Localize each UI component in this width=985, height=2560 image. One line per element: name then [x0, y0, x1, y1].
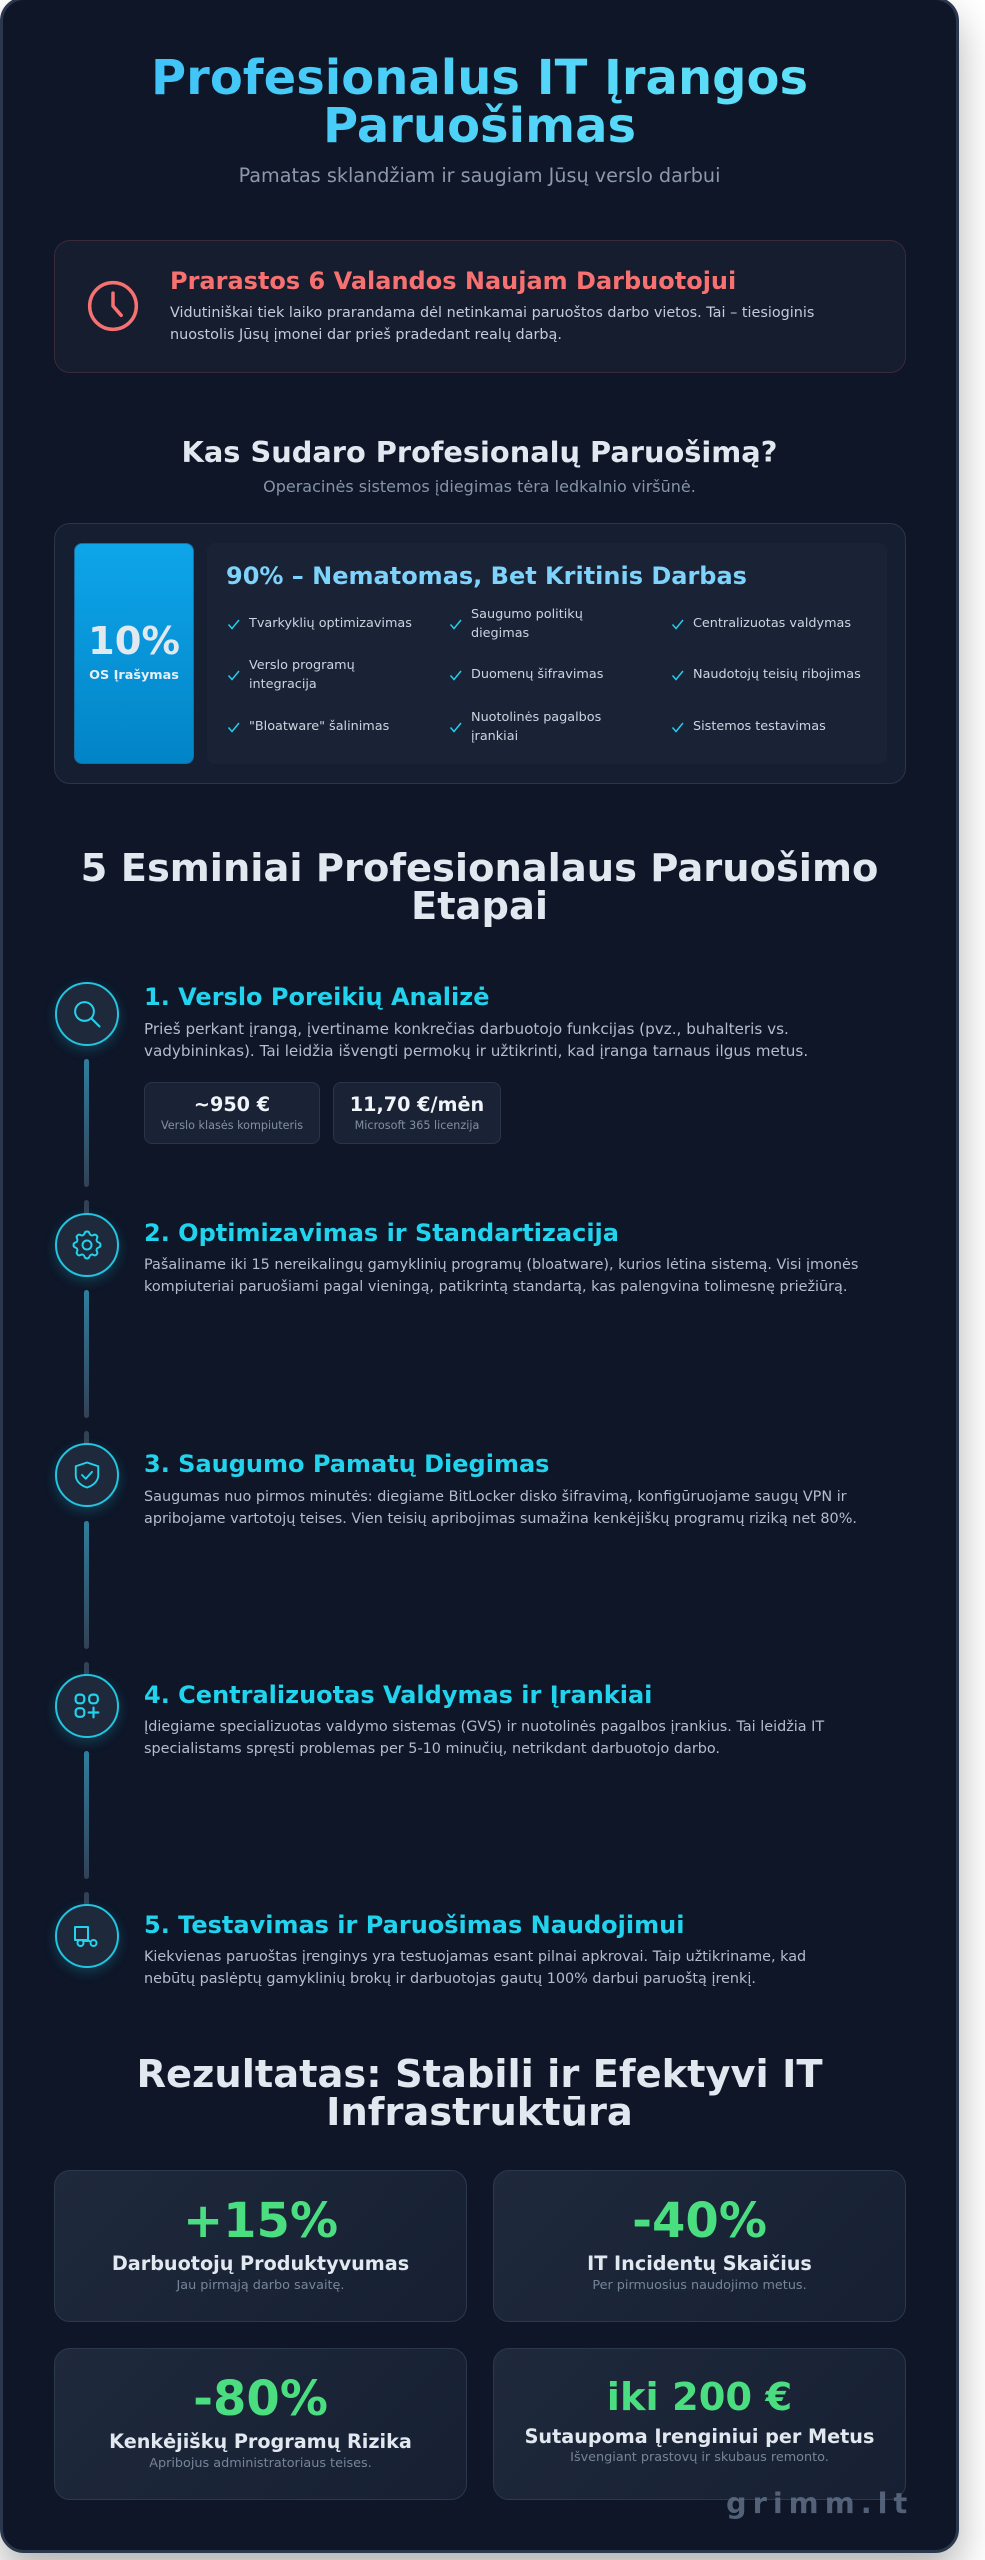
checklist item: Verslo programų	[249, 658, 355, 673]
step 3 text: apribojame vartotojų teises. Vien teisių apribojimas sumažina kenkėjiškų programų riziką net 80%.	[144, 1511, 857, 1527]
step 5 title: 5. Testavimas ir Paruošimas Naudojimui	[144, 1911, 684, 1939]
connector 4	[84, 1751, 89, 1879]
metric note: Apribojus administratoriaus teises.	[149, 2456, 372, 2471]
step 2 text: Pašaliname iki 15 nereikalingų gamyklinių programų (bloatware), kurios lėtina sistemą. Visi įmonės	[144, 1257, 858, 1273]
metric: -80%	[193, 2371, 328, 2427]
section heading: results	[136, 2052, 823, 2135]
section heading: five stages: 5 Esminiai Profesionalaus Paruošimo	[81, 846, 878, 891]
checklist item: diegimas	[471, 626, 529, 641]
checklist item	[228, 658, 355, 692]
checklist item: integracija	[249, 677, 317, 692]
step 4 text	[144, 1719, 824, 1757]
chip: computer price	[144, 1082, 320, 1144]
step 2 title: 2. Optimizavimas ir Standartizacija	[144, 1219, 619, 1247]
icon: shield	[54, 1443, 118, 1507]
checklist item: įrankiai	[471, 729, 518, 744]
alert text: Vidutiniškai tiek laiko prarandama dėl netinkamai paruoštos darbo vietos. Tai – tiesioginis	[170, 305, 814, 321]
connector 3	[84, 1521, 89, 1649]
result card: malware risk	[54, 2348, 467, 2500]
panel: iceberg breakdown	[54, 523, 906, 784]
10% value: 10%	[88, 619, 180, 664]
step 5 text: nebūtų paslėptų gamyklinių brokų ir darbuotojas gautų 100% darbui paruoštą įrenkį.	[144, 1971, 756, 1987]
checklist item: Saugumo politikų	[471, 607, 583, 622]
checklist item: Sistemos testavimas	[693, 719, 826, 734]
step 1 text	[144, 1020, 808, 1060]
result card: savings	[493, 2348, 906, 2500]
alert heading: Prarastos 6 Valandos Naujam Darbuotojui	[170, 267, 736, 295]
result card: productivity	[54, 2170, 467, 2322]
section subtitle: Operacinės sistemos įdiegimas tėra ledkalnio viršūnė.	[263, 477, 696, 496]
10% block	[74, 543, 194, 764]
step 1 text: Prieš perkant įrangą, įvertiname konkrečias darbuotojo funkcijas (pvz., buhalteris vs.	[144, 1020, 789, 1038]
watermark: grimm.lt	[726, 2486, 913, 2520]
metric label: Sutaupoma Įrenginiui per Metus	[525, 2425, 874, 2448]
checklist item	[450, 607, 583, 641]
subtitle: Pamatas sklandžiam ir saugiam Jūsų verslo darbui	[239, 164, 720, 187]
icon: clock	[88, 280, 138, 332]
checklist item: Duomenų šifravimas	[471, 667, 603, 682]
section heading: five stages: Etapai	[411, 884, 548, 929]
step 3 text: Saugumas nuo pirmos minutės: diegiame BitLocker disko šifravimą, konfigūruojame saugų VPN ir	[144, 1489, 847, 1505]
section heading: results: Infrastruktūra	[326, 2090, 633, 2135]
title: Paruošimas	[323, 98, 636, 154]
alert text	[170, 305, 814, 343]
title	[0, 54, 959, 150]
checklist item: Tvarkyklių optimizavimas	[249, 616, 412, 631]
90% heading: 90% – Nematomas, Bet Kritinis Darbas	[226, 562, 747, 590]
checklist item: Centralizuotas valdymas	[693, 616, 851, 631]
90% block	[207, 543, 887, 764]
step 1 text: vadybininkas). Tai leidžia išvengti permokų ir užtikrinti, kad įranga tarnaus ilgus metus.	[144, 1042, 808, 1060]
step 4 title: 4. Centralizuotas Valdymas ir Įrankiai	[144, 1681, 652, 1709]
section heading: results: Rezultatas: Stabili ir Efektyvi IT	[136, 2052, 823, 2097]
metric label: Darbuotojų Produktyvumas	[112, 2252, 409, 2275]
step 2 text: kompiuteriai paruošiami pagal vieningą, patikrintą standartą, kas palengvina tolimesnę priežiūrą.	[144, 1279, 847, 1295]
metric: -40%	[632, 2193, 767, 2249]
chip: computer price: Verslo klasės kompiuteris	[161, 1119, 303, 1132]
connector 1	[84, 1059, 89, 1187]
metric note: Per pirmuosius naudojimo metus.	[592, 2278, 807, 2293]
step 3 text	[144, 1489, 857, 1527]
step 3 title: 3. Saugumo Pamatų Diegimas	[144, 1450, 549, 1478]
metric note: Išvengiant prastovų ir skubaus remonto.	[570, 2450, 829, 2465]
connector 2	[84, 1290, 89, 1418]
step 1 title: 1. Verslo Poreikių Analizė	[144, 983, 490, 1011]
result card: incidents	[493, 2170, 906, 2322]
metric: iki 200 €	[607, 2375, 792, 2420]
icon: gear	[54, 1213, 118, 1277]
icon: test cart	[54, 1904, 118, 1968]
10% label: OS Įrašymas	[89, 668, 179, 683]
checklist item	[450, 710, 601, 744]
step 5 text	[144, 1949, 806, 1987]
icon: apps grid	[54, 1674, 118, 1738]
section heading: five stages	[81, 846, 878, 929]
step 5 text: Kiekvienas paruoštas įrenginys yra testuojamas esant pilnai apkrovai. Taip užtikriname, kad	[144, 1949, 806, 1965]
step 4 text: specialistams spręsti problemas per 5-10 minučių, netrikdant darbuotojo darbo.	[144, 1741, 720, 1757]
icon: magnifier	[54, 982, 118, 1046]
metric: +15%	[183, 2193, 338, 2249]
panel: lost hours alert	[54, 240, 906, 373]
metric label: IT Incidentų Skaičius	[587, 2252, 812, 2275]
metric note: Jau pirmąją darbo savaitę.	[177, 2278, 344, 2293]
checklist item: Naudotojų teisių ribojimas	[693, 667, 861, 682]
checklist item: Nuotolinės pagalbos	[471, 710, 601, 725]
chip: licence price	[333, 1082, 501, 1144]
alert text: nuostolis Jūsų įmonei dar prieš pradedant realų darbą.	[170, 327, 562, 343]
chip: computer price: ~950 €	[194, 1093, 270, 1116]
checklist item: "Bloatware" šalinimas	[249, 719, 389, 734]
step 4 text: Įdiegiame specializuotas valdymo sistemas (GVS) ir nuotolinės pagalbos įrankius. Tai leidžia IT	[144, 1719, 824, 1735]
chip: licence price: Microsoft 365 licenzija	[355, 1119, 479, 1132]
step 2 text	[144, 1257, 858, 1295]
chip: licence price: 11,70 €/mėn	[350, 1093, 484, 1116]
metric label: Kenkėjiškų Programų Rizika	[109, 2430, 412, 2453]
title: Profesionalus IT Įrangos	[151, 50, 808, 106]
section heading: what makes up preparation: Kas Sudaro Profesionalų Paruošimą?	[182, 435, 777, 469]
